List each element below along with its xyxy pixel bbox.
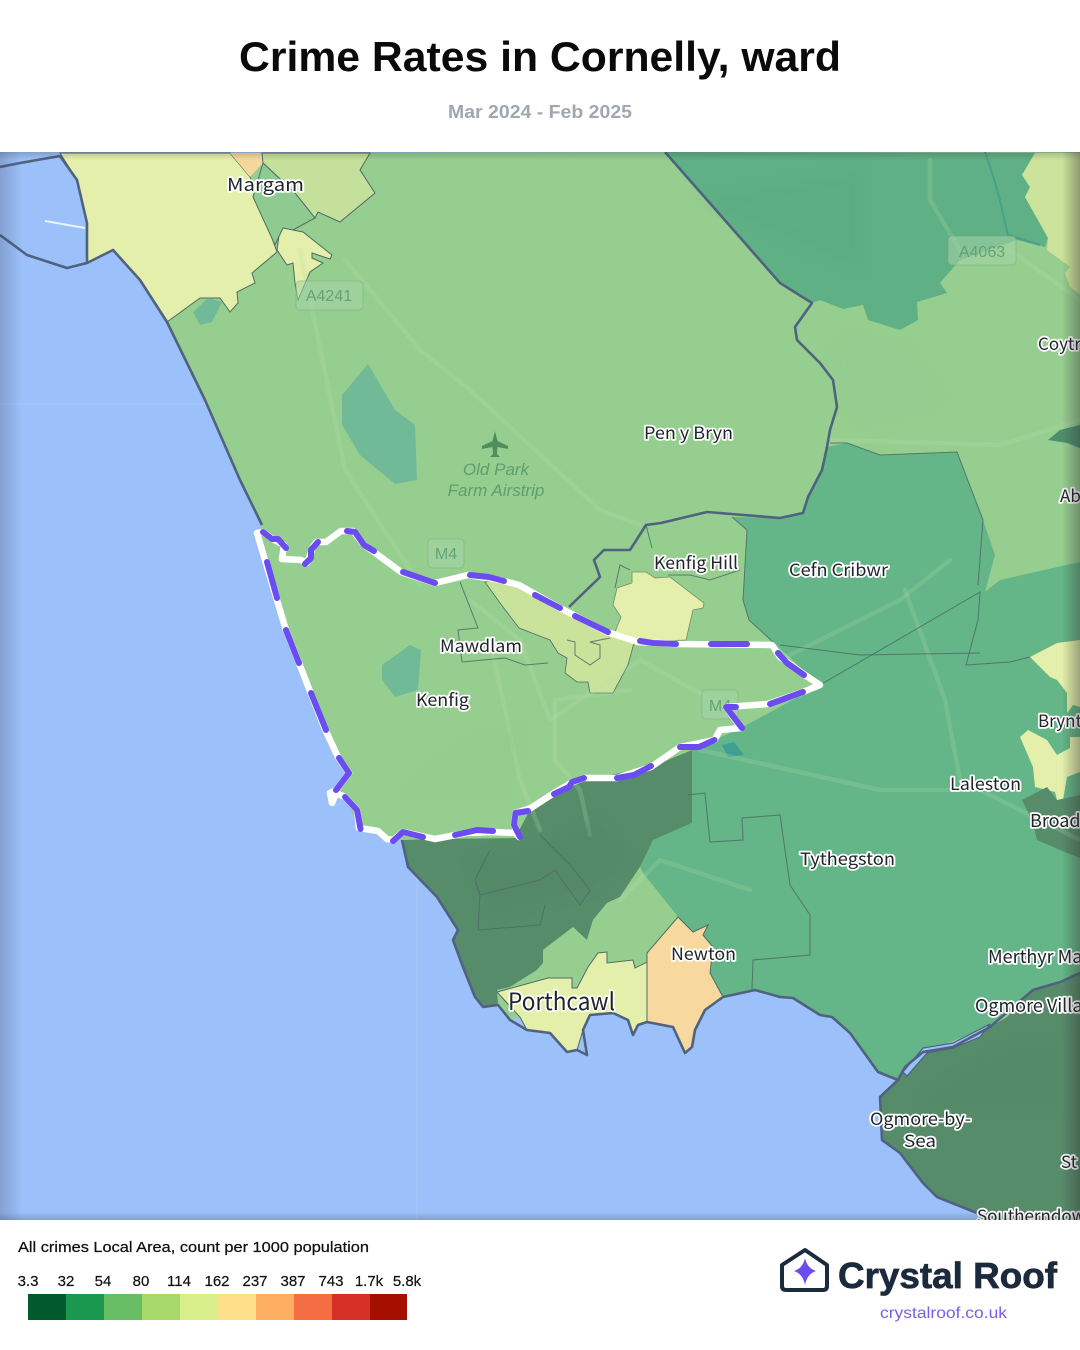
road shield: A4063 [948,236,1016,265]
road shield: A4063: A4063 [959,244,1005,261]
roads and faint land features [298,158,1080,892]
region: Margam yellow-green [262,153,375,222]
river Ogmore [903,1024,990,1076]
place labels: Kenfig Hill [654,549,738,574]
outline purple dashes [263,531,804,841]
label: Old Park Farm Airstrip: Farm Airstrip [448,481,544,500]
region: yellow-green top right corner [1022,153,1080,295]
sea [0,152,1080,1220]
road shield: M4 east: M4 [709,698,731,715]
place labels: Tythegston [800,845,895,870]
region: Margam mid green [253,163,315,245]
land silhouette: light green [168,152,1080,1044]
ship in the bay [45,221,85,228]
legend scale labels: 387 [280,1273,306,1290]
region: Margam works yellow [277,227,332,300]
legend scale labels: 237 [242,1273,268,1290]
legend scale labels: 32 [58,1273,74,1290]
place labels: Cefn Cribwr [789,556,888,581]
title: Crime Rates in Cornelly, ward [239,33,841,80]
region: Margam pale yellow [60,153,277,322]
place labels: Mawdlam [440,632,522,657]
legend scale labels [18,1273,422,1290]
website: crystalroof.co.uk [880,1305,1008,1322]
region: medium green north-east [665,152,1048,330]
place labels: Newton [671,940,736,965]
legend title: All crimes Local Area, count per 1000 population [18,1239,369,1256]
label: Old Park Farm Airstrip: Old Park [463,460,531,479]
icon: house with sparkle [782,1250,827,1290]
road shield: M4 west [428,539,464,568]
region: Porthcawl west light green [498,927,574,990]
logo: Crystal Roof [782,1250,1058,1322]
place labels: Laleston [950,770,1021,795]
region: Newton orange [647,917,723,1053]
region: right light green dark patch [1048,425,1080,448]
ward area: Cornelly thin boundaries [458,443,1030,990]
region: Porthcawl pale yellow [497,952,647,1052]
legend [18,1239,422,1320]
region: south yellow patches and Broadlands [1020,640,1080,858]
legend scale labels: 114 [167,1273,191,1290]
outline white [257,531,820,840]
place labels: Margam [227,171,304,197]
legend scale labels: 743 [318,1273,344,1290]
road shield: A4241 [296,281,363,310]
legend scale labels: 162 [204,1273,230,1290]
road shield: M4 east [702,690,738,719]
legend scale labels: 80 [133,1273,149,1290]
region: small orange [230,153,263,177]
subtitle: date range: Mar 2024 - Feb 2025 [448,102,632,122]
region: Kenfig Hill pale yellow [613,572,704,642]
region: Nottage light green [587,867,676,940]
road shield: A4241: A4241 [306,288,352,305]
region: Ogmore dark green [880,973,1080,1220]
map panel [0,152,1080,1227]
legend colour scale [28,1294,407,1320]
logo wordmark: Crystal Roof [838,1255,1058,1296]
legend scale labels: 3.3 [18,1273,38,1290]
legend scale labels: 1.7k [355,1273,384,1290]
place labels: Porthcawl [508,982,615,1017]
region: Porthcawl north dark green [402,750,692,1007]
faint sea tile seams [0,404,417,1220]
place labels: Pen y Bryn [644,419,733,444]
region: Pyle yellow-green [485,580,634,693]
water bodies [193,152,1040,757]
region: medium green south and east [640,443,1080,1080]
ward outline: Cornelly [257,531,820,841]
place labels: Ogmore-by- [870,1105,971,1130]
legend scale labels: 5.8k [393,1273,422,1290]
icon: airstrip plane [482,431,508,457]
thick authority boundary and coast [0,152,1080,1220]
legend scale labels: 54 [95,1273,111,1290]
place labels [227,171,1080,1227]
map edge shading [0,152,1080,1220]
place labels: Kenfig [416,686,469,711]
road shield: M4 west: M4 [435,546,457,563]
place labels: Sea [904,1127,936,1152]
